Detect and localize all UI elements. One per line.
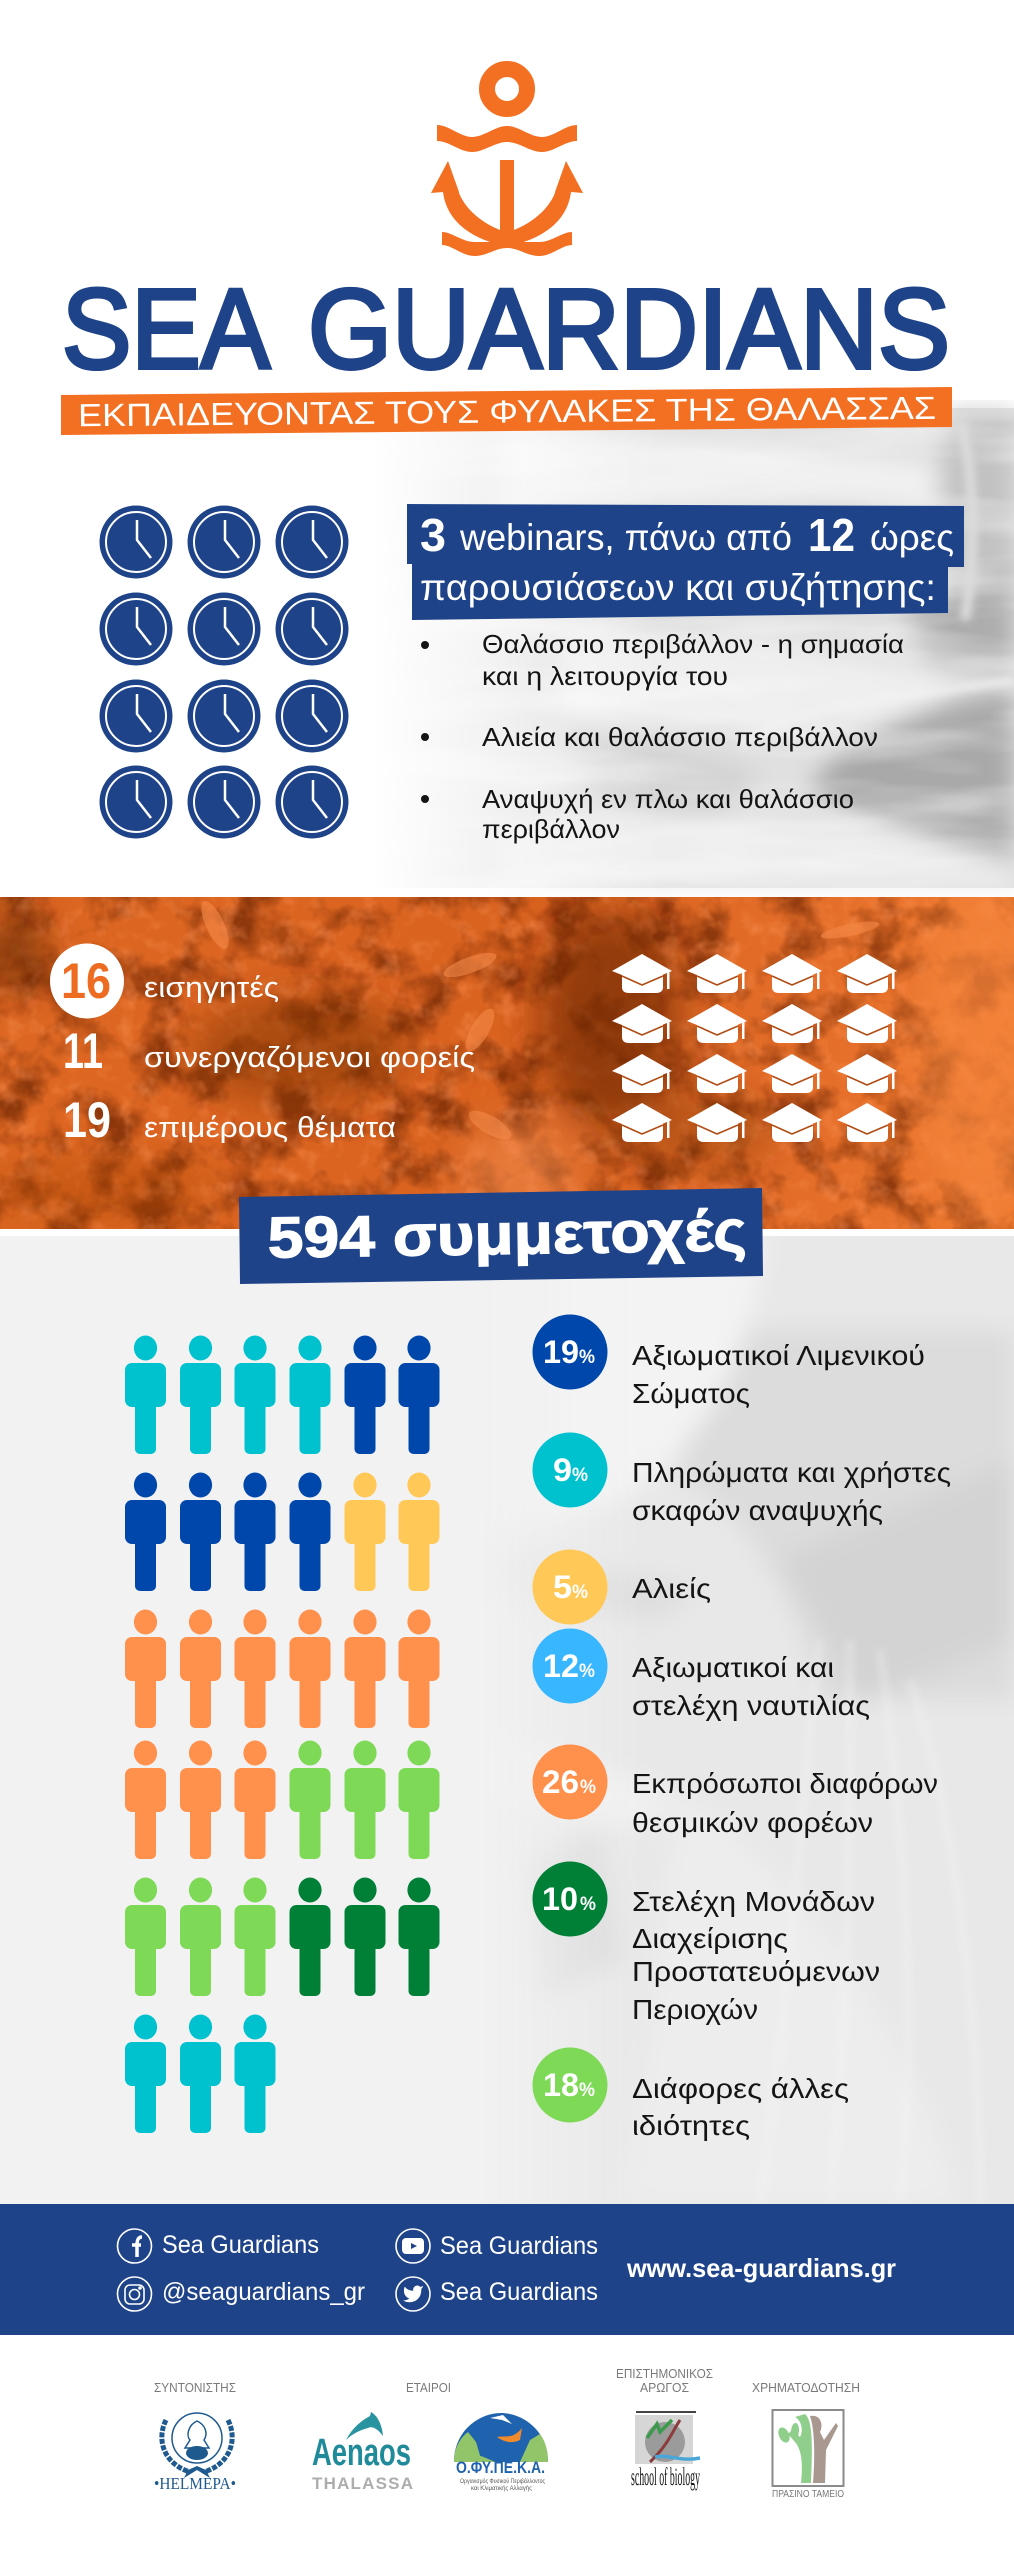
social handles: Sea Guardians: [440, 2278, 598, 2306]
title: GUARDIANS: [308, 266, 950, 392]
webinar topics list: και η λειτουργία του: [482, 661, 728, 691]
legend: 5% fishers: [532, 1550, 711, 1624]
legend: 19% port corps officers: Αξιωματικοί Λιμενικού: [632, 1340, 925, 1371]
webinars heading: 3: [420, 509, 446, 561]
graduation caps grid: [612, 954, 897, 1142]
social handles: @seaguardians_gr: [162, 2278, 365, 2306]
social media band: [0, 2204, 1014, 2335]
logo: anchor: [431, 69, 583, 256]
icon: facebook: [118, 2229, 152, 2263]
stats: speakers, partners, topics: 16: [61, 953, 111, 1009]
legend: 18% other professions: ιδιότητες: [632, 2110, 750, 2141]
webinars heading: [407, 504, 964, 620]
legend: 12% shipping officers: [532, 1628, 870, 1721]
stats: speakers, partners, topics: [50, 944, 475, 1148]
legend: 10% protected area unit staff: Περιοχών: [632, 1994, 758, 2025]
legend: 9% crews and pleasure boat users: [532, 1432, 951, 1526]
subtitle banner: ΕΚΠΑΙΔΕΥΟΝΤΑΣ ΤΟΥΣ ΦΥΛΑΚΕΣ ΤΗΣ ΘΑΛΑΣΣΑΣ: [78, 390, 936, 433]
logo: OFYPEKA: και Κλιματικής Αλλαγής: [471, 2485, 532, 2492]
webinars heading: webinars, πάνω από: [459, 517, 792, 558]
legend: 18% other professions: %: [579, 2080, 595, 2101]
logo: Aenaos Thalassa: Aenaos: [312, 2432, 411, 2474]
legend: 18% other professions: 18: [543, 2067, 579, 2103]
webinar topics list: περιβάλλον: [482, 814, 620, 844]
icon: youtube: [396, 2229, 430, 2263]
logo: Aenaos Thalassa: THALASSA: [312, 2474, 413, 2493]
legend: 19% port corps officers: [532, 1314, 925, 1409]
legend: 26% institutional representatives: 26: [542, 1764, 579, 1800]
legend: 10% protected area unit staff: Προστατευόμενων: [632, 1956, 880, 1987]
logo: Green Fund: [772, 2410, 844, 2500]
icon: instagram: [118, 2277, 152, 2311]
legend: 10% protected area unit staff: Στελέχη Μονάδων: [632, 1886, 875, 1917]
legend: 9% crews and pleasure boat users: %: [572, 1465, 588, 1486]
legend: 19% port corps officers: Σώματος: [632, 1378, 750, 1409]
legend: 26% institutional representatives: θεσμικών φορέων: [632, 1807, 873, 1838]
legend: 9% crews and pleasure boat users: Πληρώματα και χρήστες: [632, 1457, 951, 1488]
sponsor labels: ΣΥΝΤΟΝΙΣΤΗΣ: [154, 2381, 236, 2395]
stats: speakers, partners, topics: επιμέρους θέματα: [144, 1112, 396, 1144]
legend: 9% crews and pleasure boat users: 9: [553, 1452, 572, 1488]
social handles: Sea Guardians: [440, 2232, 598, 2260]
sponsor labels: ΑΡΩΓΟΣ: [640, 2381, 689, 2395]
webinars heading: ώρες: [870, 517, 954, 558]
webinars heading: 12: [808, 509, 855, 561]
logo: OFYPEKA: Οργανισμός Φυσικού Περιβάλλοντος: [460, 2478, 545, 2485]
website: www.sea-guardians.gr: [626, 2253, 896, 2283]
participations heading: 594 συμμετοχές: [267, 1198, 747, 1271]
stats: speakers, partners, topics: 19: [63, 1092, 111, 1148]
stats: speakers, partners, topics: εισηγητές: [144, 972, 279, 1004]
sponsor labels: ΕΠΙΣΤΗΜΟΝΙΚΟΣ: [616, 2367, 713, 2381]
legend: 12% shipping officers: %: [579, 1661, 595, 1682]
sponsor labels: ΧΡΗΜΑΤΟΔΟΤΗΣΗ: [752, 2381, 860, 2395]
logo: School of Biology: [631, 2411, 700, 2491]
legend: 19% port corps officers: %: [579, 1347, 595, 1368]
people pictogram: [125, 1336, 440, 2133]
logo: HELMEPA: [154, 2413, 236, 2493]
logo: OFYPEKA: [454, 2413, 548, 2492]
legend: 10% protected area unit staff: 10: [542, 1881, 578, 1917]
legend: 12% shipping officers: στελέχη ναυτιλίας: [632, 1690, 870, 1721]
text: school of biology: [631, 2464, 700, 2491]
legend: 26% institutional representatives: Εκπρόσωποι διαφόρων: [632, 1768, 938, 1799]
legend: 5% fishers: 5: [553, 1569, 572, 1605]
webinars heading: παρουσιάσεων και συζήτησης:: [420, 567, 936, 608]
legend: 26% institutional representatives: [532, 1744, 938, 1838]
logo: HELMEPA: •HELMEPA•: [154, 2474, 236, 2493]
legend: 18% other professions: [532, 2048, 849, 2141]
background photo: coral reef: [0, 880, 1014, 1229]
logo: Green Fund: ΠΡΑΣΙΝΟ ΤΑΜΕΙΟ: [772, 2488, 844, 2500]
social handles: [162, 2231, 598, 2306]
social handles: Sea Guardians: [162, 2231, 319, 2259]
legend: 19% port corps officers: 19: [543, 1334, 579, 1370]
sponsor labels: ΕΤΑΙΡΟΙ: [406, 2381, 451, 2395]
legend: 10% protected area unit staff: %: [580, 1894, 596, 1915]
webinar topics list: Θαλάσσιο περιβάλλον - η σημασία: [482, 629, 904, 659]
participations heading: [239, 1188, 763, 1284]
legend: 10% protected area unit staff: [532, 1862, 880, 2025]
title: [62, 266, 950, 392]
sponsor labels: [154, 2367, 860, 2395]
background photo: fish: [448, 400, 1014, 889]
legend: 10% protected area unit staff: Διαχείρισης: [632, 1923, 788, 1954]
webinar topics list: [421, 629, 904, 844]
legend: 26% institutional representatives: %: [580, 1777, 596, 1798]
legend: 9% crews and pleasure boat users: σκαφών αναψυχής: [632, 1495, 883, 1526]
webinar topics list: Αναψυχή εν πλω και θαλάσσιο: [482, 784, 854, 814]
background photo: fishing nets: [0, 1230, 1014, 2204]
clock grid: 12 hours: [100, 506, 348, 838]
logo: OFYPEKA: Ο.ΦΥ.ΠΕ.Κ.Α.: [456, 2458, 545, 2477]
legend: 5% fishers: Αλιείς: [632, 1573, 711, 1604]
legend: 12% shipping officers: 12: [543, 1648, 579, 1684]
webinar topics list: Αλιεία και θαλάσσιο περιβάλλον: [482, 722, 878, 752]
stats: speakers, partners, topics: συνεργαζόμενοι φορείς: [144, 1042, 475, 1074]
legend: 18% other professions: Διάφορες άλλες: [632, 2073, 849, 2104]
logo: Aenaos Thalassa: [312, 2412, 413, 2493]
legend: 12% shipping officers: Αξιωματικοί και: [632, 1652, 834, 1683]
legend: 5% fishers: %: [572, 1582, 588, 1603]
icon: twitter: [396, 2277, 430, 2311]
title: SEA: [62, 266, 271, 392]
stats: speakers, partners, topics: 11: [63, 1023, 103, 1079]
